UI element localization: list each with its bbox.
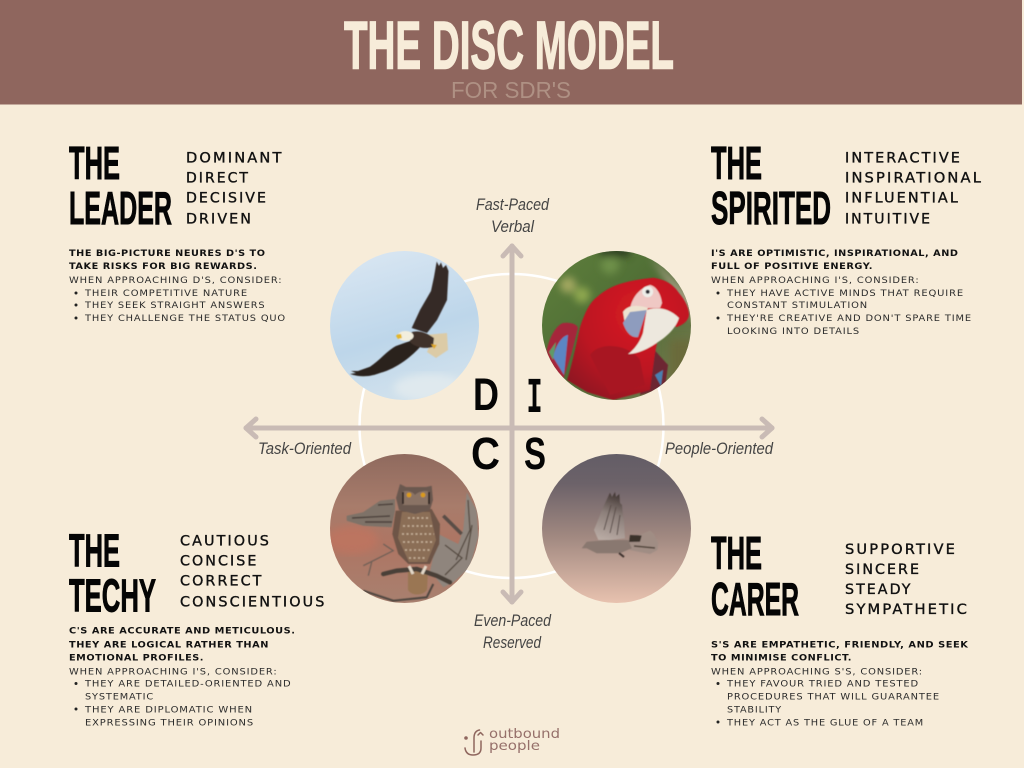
description: I: I'S ARE OPTIMISTIC, INSPIRATIONAL, AND (711, 249, 958, 259)
description: S: WHEN APPROACHING S'S, CONSIDER: (711, 666, 923, 678)
heading: the techy (69, 524, 156, 622)
description: C: THEY ARE DIPLOMATIC WHEN (84, 704, 253, 716)
traits: D: DOMINANT (186, 150, 284, 166)
traits: C: CAUTIOUS (180, 534, 271, 550)
description: I: THEY'RE CREATIVE AND DON'T SPARE TIME (726, 313, 972, 324)
heading: the spirited (711, 137, 831, 234)
quadrant letters: I (526, 371, 542, 428)
heading: the leader (69, 137, 172, 234)
logo: outbound people: outbound (489, 726, 560, 742)
description: S: TO MINIMISE CONFLICT. (711, 654, 852, 664)
traits: I (845, 150, 983, 228)
traits: D: DECISIVE (186, 190, 268, 206)
description: C: EMOTIONAL PROFILES. (69, 654, 204, 664)
description: I: THEY HAVE ACTIVE MINDS THAT REQUIRE (726, 288, 964, 299)
traits: D: DRIVEN (186, 212, 253, 228)
description: I (711, 249, 972, 337)
description: I: LOOKING INTO DETAILS (727, 326, 860, 337)
description: I: FULL OF POSITIVE ENERGY. (711, 262, 873, 272)
photo: macaw (542, 245, 695, 400)
description: C: EXPRESSING THEIR OPINIONS (85, 718, 254, 728)
title: THE DISC MODEL (344, 8, 674, 84)
header banner (0, 0, 1022, 104)
traits: I: INFLUENTIAL (845, 190, 960, 206)
description: D: THEIR COMPETITIVE NATURE (84, 288, 248, 299)
description: I: WHEN APPROACHING I'S, CONSIDER: (711, 275, 920, 286)
horizontal axis arrow (246, 419, 772, 437)
description: D: THEY CHALLENGE THE STATUS QUO (84, 313, 286, 324)
logo: outbound people (464, 726, 560, 755)
description: S: STABILITY (727, 704, 782, 716)
description: S: S'S ARE EMPATHETIC, FRIENDLY, AND SEEK (711, 640, 969, 650)
heading: the spirited: SPIRITED (711, 182, 831, 234)
description: C: C'S ARE ACCURATE AND METICULOUS. (69, 626, 296, 636)
description: S (711, 640, 969, 728)
axis label: top: Fast-Paced (476, 196, 550, 214)
heading: the spirited: THE (711, 137, 762, 189)
description: C: WHEN APPROACHING I'S, CONSIDER: (69, 666, 278, 678)
heading: the carer: CARER (711, 573, 799, 625)
quadrant letters: S (524, 428, 546, 479)
traits: C: CONCISE (180, 554, 258, 570)
panel: the carer (711, 527, 969, 728)
description: C: SYSTEMATIC (85, 692, 154, 702)
panel: the leader (69, 137, 286, 324)
quadrant letters: C (471, 428, 500, 479)
description: C: THEY ARE LOGICAL RATHER THAN (69, 640, 269, 650)
heading: the carer (711, 527, 799, 625)
axis label: bottom: Reserved (483, 634, 542, 652)
heading: the techy: TECHY (69, 570, 156, 622)
description: D: TAKE RISKS FOR BIG REWARDS. (69, 262, 258, 272)
traits: S: STEADY (845, 582, 912, 598)
description: S: THEY FAVOUR TRIED AND TESTED (726, 678, 919, 690)
panel: the spirited (711, 137, 983, 337)
traits: I: INSPIRATIONAL (845, 170, 983, 186)
heading: the leader: LEADER (69, 182, 172, 234)
traits: C: CORRECT (180, 574, 264, 590)
traits: S: SUPPORTIVE (845, 542, 957, 558)
description: S: THEY ACT AS THE GLUE OF A TEAM (726, 718, 924, 728)
traits: S: SINCERE (845, 562, 921, 578)
subtitle: FOR SDR'S (451, 77, 571, 103)
traits: S: SYMPATHETIC (845, 602, 969, 618)
axis label: top (476, 196, 550, 236)
description: D (69, 249, 286, 324)
description: C (69, 626, 296, 728)
quadrant letters: D (473, 369, 499, 420)
traits: C: CONSCIENTIOUS (180, 594, 326, 610)
traits: C (180, 534, 326, 610)
white ring behind quadrants (360, 274, 664, 578)
axis label: right: People-Oriented (665, 440, 774, 458)
description: D: THE BIG-PICTURE NEURES D'S TO (69, 249, 266, 259)
axis label: top: Verbal (491, 218, 535, 236)
description: C: THEY ARE DETAILED-ORIENTED AND (84, 678, 292, 690)
logo: outbound people: people (489, 738, 540, 754)
quadrant letters (471, 369, 546, 479)
axis label: bottom (474, 612, 552, 652)
photo: owl (326, 454, 479, 603)
description: S: PROCEDURES THAT WILL GUARANTEE (727, 692, 940, 702)
description: I: CONSTANT STIMULATION (727, 300, 868, 311)
description: D: THEY SEEK STRAIGHT ANSWERS (84, 300, 266, 311)
traits: D: DIRECT (186, 170, 250, 186)
vertical axis arrow (503, 246, 521, 602)
photo: eagle (330, 251, 479, 402)
heading: the techy: THE (69, 524, 120, 576)
traits: I: INTERACTIVE (845, 150, 962, 166)
axis label: bottom: Even-Paced (474, 612, 552, 630)
panel: the techy (69, 524, 326, 728)
heading: the carer: THE (711, 527, 762, 579)
traits: I: INTUITIVE (845, 212, 932, 228)
heading: the leader: THE (69, 137, 120, 189)
axis label: left: Task-Oriented (258, 440, 352, 458)
traits: D (186, 150, 284, 228)
photo: dove (542, 454, 691, 603)
description: D: WHEN APPROACHING D'S, CONSIDER: (69, 275, 282, 286)
traits: S (845, 542, 969, 618)
